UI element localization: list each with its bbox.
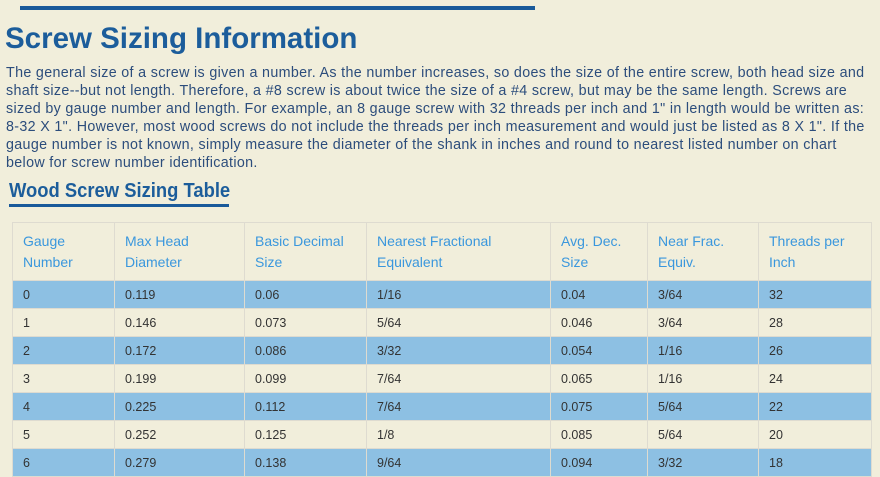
sizing table: 1/16 xyxy=(377,288,401,302)
sizing table: 1 xyxy=(23,316,30,330)
sizing table: 0.046 xyxy=(561,316,592,330)
sizing table: 1/16 xyxy=(658,372,682,386)
sizing table: Size xyxy=(255,254,282,270)
sizing table: 0.073 xyxy=(255,316,286,330)
sizing table: 6 xyxy=(23,456,30,470)
top bar xyxy=(20,6,535,10)
sizing table: 22 xyxy=(769,400,783,414)
sizing table xyxy=(12,222,872,477)
sizing table: 28 xyxy=(769,316,783,330)
sizing table: Equivalent xyxy=(377,254,442,270)
sizing table: Size xyxy=(561,254,588,270)
sizing table: 0.06 xyxy=(255,288,279,302)
sizing table: 3/32 xyxy=(658,456,682,470)
sizing table: Nearest Fractional xyxy=(377,232,491,248)
sizing table: 18 xyxy=(769,456,783,470)
sizing table: 20 xyxy=(769,428,783,442)
sizing table: 5/64 xyxy=(658,428,682,442)
sizing table: Equiv. xyxy=(658,254,696,270)
sizing table: 0.086 xyxy=(255,344,286,358)
sizing table: 0.279 xyxy=(125,456,156,470)
intro paragraph: The general size of a screw is given a number. As the number increases, so does the size of the entire screw, both head size and shaft size--but not length. Therefore, a #8 screw is about twice the size of a #4 screw, but may be the same length. Screws are sized by gauge number and length. For example, an 8 gauge screw with 32 threads per inch and 1" in length would be written as: 8-32 X 1". However, most wood screws do not include the threads per inch measurement and would just be listed as 8 X 1". If the gauge number is not known, simply measure the diameter of the shank in inches and round to nearest listed number on chart below for screw number identification. xyxy=(6,65,865,171)
sizing table: 0.112 xyxy=(255,400,285,414)
sizing table: 3/64 xyxy=(658,316,682,330)
sizing table: 0.125 xyxy=(255,428,286,442)
sizing table: 0.146 xyxy=(125,316,156,330)
sizing table: Gauge xyxy=(23,232,65,248)
sizing table: 0.04 xyxy=(561,288,585,302)
sizing table: 1/16 xyxy=(658,344,682,358)
sizing table: Max Head xyxy=(125,232,189,248)
sizing table: 5/64 xyxy=(377,316,401,330)
subheading: Wood Screw Sizing Table xyxy=(9,180,230,202)
sizing table: 0.252 xyxy=(125,428,156,442)
sizing table: 5/64 xyxy=(658,400,682,414)
sizing table: 2 xyxy=(23,344,30,358)
sizing table: 0.138 xyxy=(255,456,286,470)
sizing table: 0.075 xyxy=(561,400,592,414)
sizing table: 7/64 xyxy=(377,400,401,414)
sizing table: Threads per xyxy=(769,232,844,248)
sizing table: 7/64 xyxy=(377,372,401,386)
sizing table: Near Frac. xyxy=(658,232,724,248)
sizing table: Basic Decimal xyxy=(255,232,344,248)
title: Screw Sizing Information xyxy=(5,22,357,55)
sizing table: 0.199 xyxy=(125,372,156,386)
sizing table: 0.225 xyxy=(125,400,156,414)
sizing table: 0.054 xyxy=(561,344,592,358)
sizing table: 3/64 xyxy=(658,288,682,302)
sizing table: Inch xyxy=(769,254,795,270)
sizing table: Avg. Dec. xyxy=(561,232,621,248)
sizing table: 0.094 xyxy=(561,456,592,470)
sizing table: 1/8 xyxy=(377,428,394,442)
sizing table: 24 xyxy=(769,372,783,386)
sizing table: 0.172 xyxy=(125,344,156,358)
sizing table: 5 xyxy=(23,428,30,442)
sizing table: Number xyxy=(23,254,73,270)
sizing table: 3/32 xyxy=(377,344,401,358)
sizing table: 0.085 xyxy=(561,428,592,442)
sizing table: 0.119 xyxy=(125,288,155,302)
sizing table: 0.099 xyxy=(255,372,286,386)
sizing table: 0 xyxy=(23,288,30,302)
sizing table: 0.065 xyxy=(561,372,592,386)
sizing table: 4 xyxy=(23,400,30,414)
sizing table: Diameter xyxy=(125,254,182,270)
sizing table: 9/64 xyxy=(377,456,401,470)
sizing table: 26 xyxy=(769,344,783,358)
sizing table: 32 xyxy=(769,288,783,302)
sizing table: 3 xyxy=(23,372,30,386)
